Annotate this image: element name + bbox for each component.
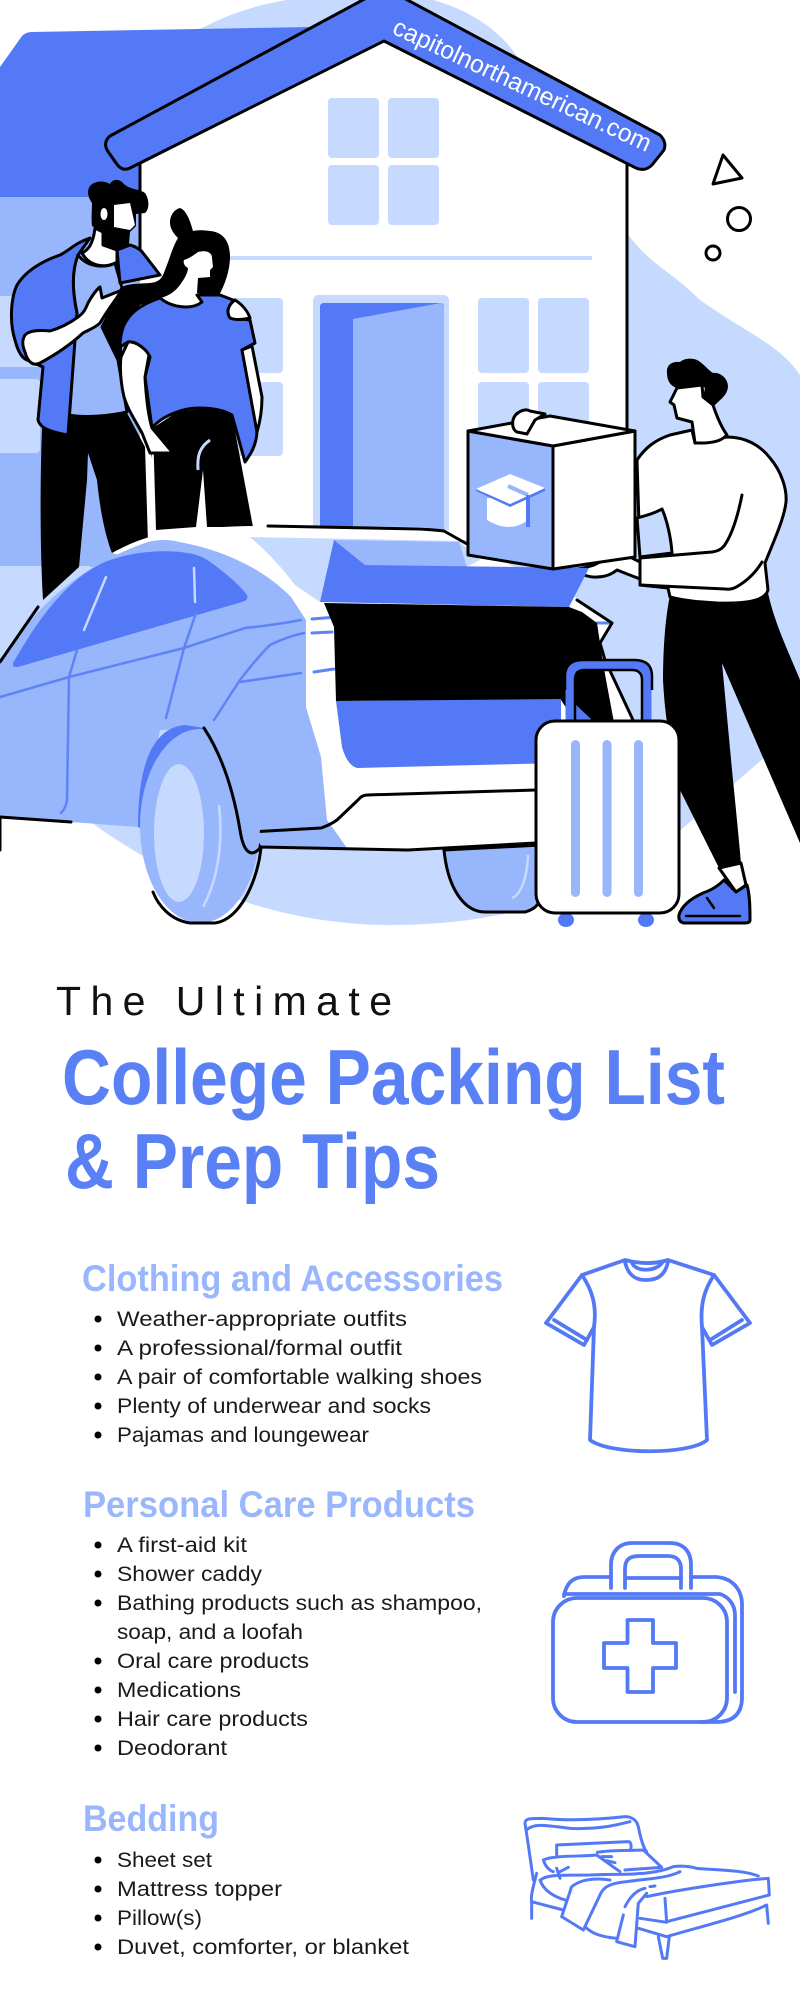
bumper: [321, 790, 536, 850]
list: Weather-appropriate outfits: [117, 1308, 407, 1331]
car body white: [112, 526, 640, 848]
list: Deodorant: [117, 1737, 227, 1760]
title: The Ultimate: [56, 978, 392, 1024]
icon: first-aid kit: [553, 1543, 742, 1722]
car detail lines: [0, 568, 610, 813]
panel: bedding: [83, 1798, 769, 1959]
suitcase: [536, 660, 679, 927]
list: Plenty of underwear and socks: [117, 1395, 431, 1418]
list: Pajamas and loungewear: [117, 1424, 369, 1447]
list: Oral care products: [117, 1650, 309, 1673]
list: Hair care products: [117, 1708, 308, 1731]
list: A pair of comfortable walking shoes: [117, 1366, 482, 1389]
list: soap, and a loofah: [117, 1621, 303, 1644]
heading: Clothing and Accessories: [82, 1258, 503, 1299]
panel: personal care products: [83, 1484, 742, 1760]
list: [94, 1308, 482, 1447]
car body blue: [0, 540, 347, 848]
list: [94, 1534, 482, 1760]
list: Medications: [117, 1679, 241, 1702]
title: [56, 978, 725, 1205]
decorative shapes: [706, 155, 750, 260]
person carrying box: [572, 359, 800, 923]
man figure: [11, 180, 160, 600]
car window: [13, 551, 247, 667]
rear wheel: [444, 845, 541, 912]
woman figure: [102, 208, 262, 530]
title: & Prep Tips: [65, 1117, 440, 1205]
website url: capitolnorthamerican.com: [388, 13, 656, 158]
background blob: [0, 0, 800, 925]
front wheel: [138, 725, 261, 923]
heading: Bedding: [83, 1798, 219, 1839]
panel: clothing and accessories: [82, 1258, 750, 1451]
roof: [106, 0, 665, 169]
car: [0, 526, 640, 923]
list: Sheet set: [117, 1849, 212, 1872]
list: Mattress topper: [117, 1878, 282, 1901]
trunk lid: [334, 540, 467, 567]
list: A first-aid kit: [117, 1534, 247, 1557]
front house: [140, 41, 627, 540]
list: A professional/formal outfit: [117, 1337, 402, 1360]
icon: bed: [525, 1817, 769, 1958]
list: Bathing products such as shampoo,: [117, 1592, 482, 1615]
list: Pillow(s): [117, 1907, 202, 1930]
hero illustration: [0, 0, 800, 927]
list: [94, 1849, 409, 1959]
icon: t-shirt: [546, 1260, 750, 1451]
heading: Personal Care Products: [83, 1484, 475, 1525]
icon: graduation cap: [476, 474, 545, 527]
door: [313, 295, 449, 530]
list: Shower caddy: [117, 1563, 263, 1586]
back house: [0, 27, 311, 626]
list: Duvet, comforter, or blanket: [117, 1936, 409, 1959]
box: [468, 410, 635, 569]
trunk interior: [324, 603, 612, 720]
